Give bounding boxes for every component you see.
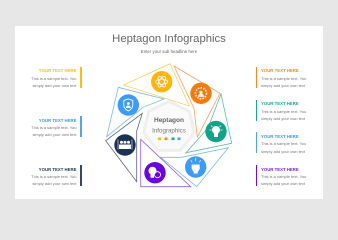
text block: left blue: This is a sample text. You bbox=[31, 125, 76, 130]
accent bar: left yellow bbox=[80, 67, 82, 88]
text block: right purple: simply add your own text bbox=[261, 181, 305, 186]
text block: left blue: YOUR TEXT HERE bbox=[39, 118, 76, 122]
text block: right purple: YOUR TEXT HERE bbox=[261, 166, 299, 172]
icon: shield blue bbox=[118, 94, 139, 116]
text block: right blue bbox=[261, 134, 306, 154]
segment outline: yellow bbox=[124, 64, 189, 106]
segment outline: teal bbox=[186, 94, 232, 153]
center heading: Heptagon bbox=[154, 117, 184, 124]
text block: left yellow: YOUR TEXT HERE bbox=[39, 68, 76, 73]
icon: gear orange bbox=[190, 83, 212, 104]
segment outline: purple bbox=[141, 139, 191, 187]
text block: left navy: YOUR TEXT HERE bbox=[39, 166, 76, 172]
accent bar: right blue bbox=[256, 132, 257, 153]
center colour dots bbox=[158, 138, 180, 140]
icon: hand blue bbox=[185, 156, 206, 178]
text block: right blue: YOUR TEXT HERE bbox=[261, 134, 299, 139]
text block: right teal: simply add your own text bbox=[261, 116, 305, 121]
text block: left navy: simply add your own text bbox=[32, 181, 76, 186]
accent bar: left navy bbox=[80, 165, 82, 186]
segment outline: left blue bbox=[107, 87, 164, 137]
text block: left blue: simply add your own text bbox=[32, 132, 76, 137]
center subheading: Infographics bbox=[152, 128, 186, 134]
icon: team navy bbox=[114, 134, 136, 156]
text block: right orange: simply add your own text bbox=[261, 83, 305, 88]
text block: right blue: This is a sample text. You bbox=[261, 141, 306, 146]
text block: right teal: This is a sample text. You bbox=[261, 109, 306, 114]
title: Heptagon Infographics bbox=[112, 33, 226, 45]
text block: left yellow: simply add your own text bbox=[32, 83, 76, 88]
accent bar: right teal bbox=[256, 100, 257, 121]
icon: head purple bbox=[144, 162, 166, 183]
segment outline: right blue bbox=[161, 148, 228, 187]
text block: right teal: YOUR TEXT HERE bbox=[261, 101, 299, 106]
text block: right orange: YOUR TEXT HERE bbox=[261, 68, 299, 73]
icon: atom yellow bbox=[151, 71, 172, 92]
text block: left blue bbox=[31, 118, 76, 137]
text block: left yellow bbox=[31, 68, 76, 88]
accent bar: left blue bbox=[80, 116, 82, 137]
text block: left yellow: This is a sample text. You bbox=[31, 76, 76, 81]
text block: right teal bbox=[261, 101, 306, 121]
center heptagon bbox=[144, 102, 194, 150]
icon: bulb teal bbox=[205, 121, 227, 142]
segment outline: navy bbox=[106, 113, 142, 182]
text block: right purple bbox=[261, 166, 306, 186]
text block: left navy: This is a sample text. You bbox=[31, 174, 76, 179]
text block: right purple: This is a sample text. You bbox=[261, 174, 306, 179]
text block: right blue: simply add your own text bbox=[261, 149, 305, 154]
subtitle: Enter your sub headline here bbox=[141, 48, 197, 54]
segment outline: orange bbox=[174, 66, 220, 137]
text block: right orange bbox=[261, 68, 306, 88]
text block: right orange: This is a sample text. You bbox=[261, 76, 306, 81]
accent bar: right orange bbox=[256, 67, 257, 88]
text block: left navy bbox=[31, 166, 76, 186]
accent bar: right purple bbox=[256, 165, 257, 186]
panel: white slide bbox=[14, 26, 323, 199]
